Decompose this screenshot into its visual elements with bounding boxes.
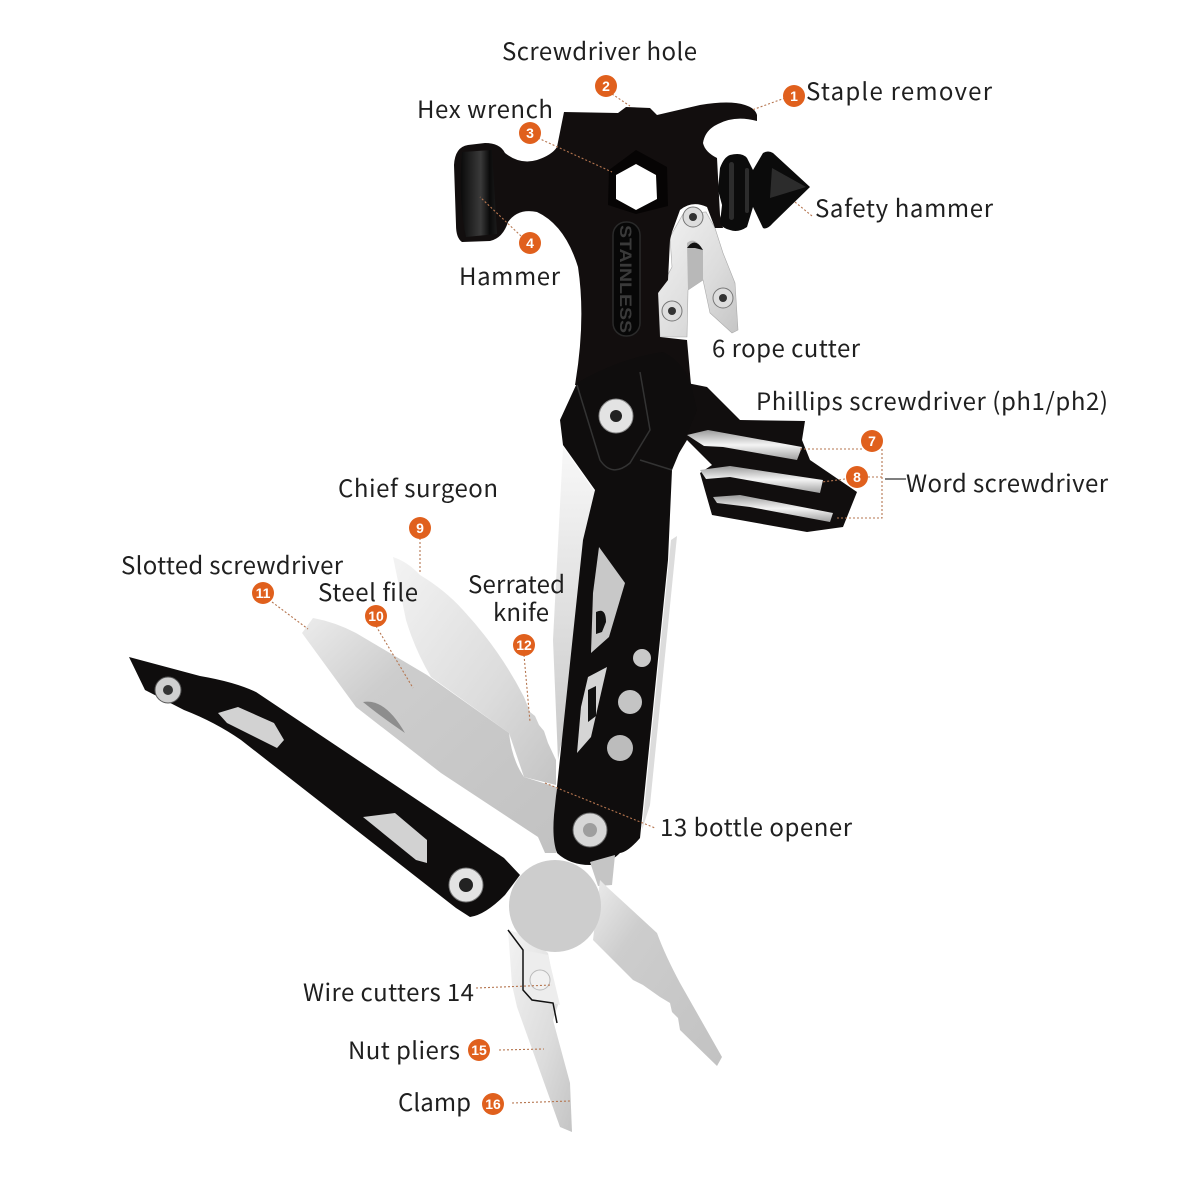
label: serrated knife: Serrated (468, 565, 565, 600)
badge 15: 15 (471, 1042, 487, 1058)
handle slot upper (591, 547, 625, 653)
blade: file and slotted screwdriver (302, 618, 556, 853)
label: serrated knife: knife (493, 593, 549, 628)
bit holder (673, 383, 857, 532)
badge 7: 7 (868, 433, 876, 449)
label: hammer: Hammer (459, 257, 561, 292)
pliers (508, 855, 722, 1132)
label: word screwdriver: Word screwdriver (906, 464, 1109, 499)
badge 11 (252, 582, 274, 604)
rivet (530, 970, 550, 990)
label: clamp: Clamp (398, 1083, 471, 1118)
badge 10 (365, 605, 387, 627)
slotted bit (713, 495, 833, 522)
badge 7 (861, 430, 883, 452)
badge 10: 10 (368, 608, 384, 624)
badge 1: 1 (790, 88, 798, 104)
plier right jaw (593, 880, 722, 1066)
label: steel file: Steel file (318, 573, 418, 608)
leader lines (272, 94, 906, 1103)
badge 12: 12 (516, 637, 532, 653)
stainless badge: STAINLESS (616, 225, 635, 333)
blade: serrated knife strip behind handle (553, 447, 597, 760)
second bit (700, 466, 823, 493)
pivot screw (599, 399, 633, 433)
badge 9 (409, 517, 431, 539)
pivot bevel lines (577, 372, 672, 470)
label: nut pliers: Nut pliers (348, 1031, 460, 1066)
left handle (129, 657, 520, 917)
badge 8 (846, 466, 868, 488)
badge 15 (468, 1039, 490, 1061)
label: slotted screwdriver: Slotted screwdriver (121, 546, 344, 581)
badge 9: 9 (416, 520, 424, 536)
badge 8: 8 (853, 469, 861, 485)
label: rope cutter: 6 rope cutter (712, 329, 861, 364)
icon: safety hammer spike (718, 152, 810, 231)
left handle slot upper (218, 707, 284, 748)
lower screw (573, 813, 607, 847)
label: bottle opener: 13 bottle opener (660, 808, 853, 843)
screw top (155, 677, 181, 703)
handle slot lower (577, 667, 607, 753)
hex hole opening (616, 164, 657, 210)
label: staple remover: Staple remover (806, 72, 993, 107)
stainless badge (613, 222, 640, 336)
badge 2 (595, 75, 617, 97)
handle hole lower (607, 735, 633, 761)
blade: chief surgeon knife (393, 557, 556, 785)
badge 3: 3 (526, 125, 534, 141)
label: screwdriver hole: Screwdriver hole (502, 32, 697, 67)
handle hole (618, 690, 642, 714)
badge 1 (783, 85, 805, 107)
label: chief surgeon: Chief surgeon (338, 469, 498, 504)
slot detail (588, 611, 606, 722)
badge 4: 4 (526, 235, 534, 251)
phillips bit (687, 430, 802, 460)
badge 2: 2 (602, 78, 610, 94)
plier left jaw (508, 930, 572, 1132)
badge 16 (482, 1093, 504, 1115)
jaw outline (508, 930, 557, 1023)
small hex hole (633, 649, 651, 667)
plate near joint (590, 855, 615, 886)
label: hex wrench: Hex wrench (417, 90, 553, 125)
multitool: hammer head (454, 102, 757, 385)
hex hole bevel (608, 150, 668, 214)
cutter window (523, 950, 560, 1005)
badge 11: 11 (256, 585, 271, 601)
hammer face highlight (461, 150, 497, 237)
label: wire cutters: Wire cutters 14 (303, 973, 474, 1008)
pivot disc (509, 860, 601, 952)
badge 3 (519, 122, 541, 144)
main handle (553, 352, 697, 865)
label: serrated knife (468, 565, 565, 628)
badge 12 (513, 634, 535, 656)
left handle slot lower (363, 813, 427, 863)
badge 16: 16 (485, 1096, 501, 1112)
badge 4 (519, 232, 541, 254)
screw bottom (449, 868, 483, 902)
label: safety hammer: Safety hammer (815, 189, 994, 224)
rope cutter (658, 207, 738, 337)
label: phillips screwdriver: Phillips screwdriver (ph1/ph2) (756, 382, 1108, 417)
